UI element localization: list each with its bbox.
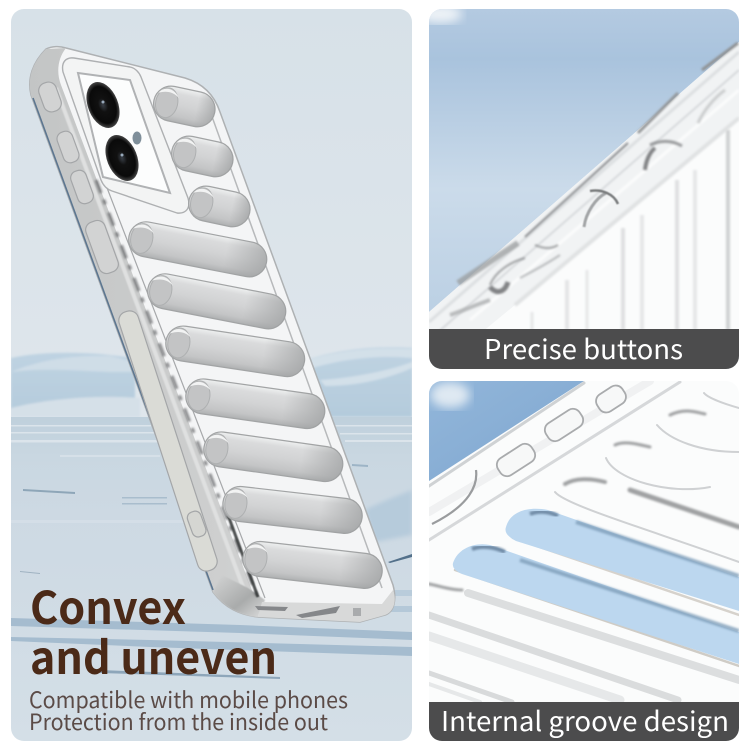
label text: Internal groove design <box>441 700 729 739</box>
button detail 1 <box>450 245 560 315</box>
side buttons <box>36 80 220 573</box>
label text: Precise buttons <box>484 328 683 367</box>
panel: internal groove design <box>429 381 739 741</box>
sky <box>429 381 584 481</box>
right water shadow <box>365 490 412 542</box>
blue groove 1 <box>505 509 739 611</box>
subheading line 2: Protection from the inside out <box>29 705 328 737</box>
camera window <box>78 73 170 193</box>
camera lens bottom <box>105 135 139 181</box>
vertical case ribs <box>532 130 728 330</box>
rim curve <box>432 470 476 524</box>
dark mottled inner strip <box>96 180 257 596</box>
blue shaded left edge <box>33 98 213 590</box>
corner chrome <box>213 575 265 617</box>
groove shadows <box>429 411 739 590</box>
blue groove 2 <box>453 544 739 664</box>
button detail 2 <box>584 191 618 227</box>
cloud <box>430 382 470 408</box>
label bar <box>429 700 739 741</box>
ice bands <box>11 590 412 679</box>
case rim lines <box>429 381 680 540</box>
heading line 1: Convex <box>30 572 186 637</box>
heading <box>32 590 274 674</box>
snowy dunes on the horizon <box>11 347 412 417</box>
subheading <box>30 690 348 730</box>
sky <box>429 9 739 369</box>
sky background <box>11 9 412 429</box>
white case background <box>429 381 739 741</box>
side buttons <box>494 382 629 479</box>
panel: precise buttons <box>418 5 739 369</box>
camera lens top <box>86 82 120 128</box>
long grooves <box>126 219 384 590</box>
inner right rim <box>206 100 382 588</box>
case body closeup <box>429 42 739 369</box>
flash <box>132 132 142 144</box>
water reflections <box>11 425 412 457</box>
label bar <box>429 328 739 369</box>
short grooves <box>150 83 253 230</box>
cloud <box>429 9 465 25</box>
wall lighter bevel <box>56 88 246 595</box>
case outer shell <box>30 47 395 622</box>
water <box>11 417 412 741</box>
charging port cutouts <box>255 606 361 618</box>
phone case <box>30 47 395 622</box>
clear grooves <box>429 393 739 702</box>
camera module <box>63 58 189 213</box>
case left side wall <box>30 48 258 617</box>
right dark ice streak <box>388 554 412 563</box>
button detail 3 <box>645 90 725 170</box>
case edge band <box>429 42 739 342</box>
distant ice streaks <box>20 464 368 574</box>
panel: main product photo <box>11 9 412 741</box>
heading line 2: and uneven <box>30 622 277 687</box>
subheading line 1: Compatible with mobile phones <box>29 683 348 715</box>
case edge highlights <box>429 43 739 340</box>
bottom edge <box>258 590 395 622</box>
